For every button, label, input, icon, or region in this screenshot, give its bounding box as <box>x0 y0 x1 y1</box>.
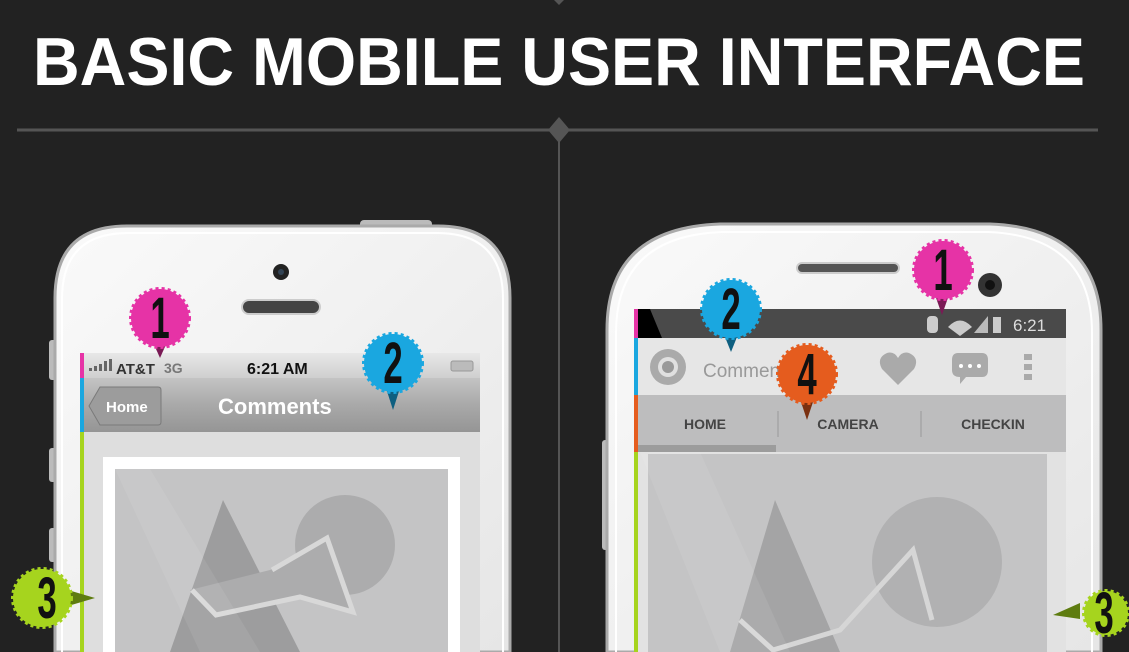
badge 2 right <box>702 278 760 352</box>
panel: Android <box>602 224 1102 652</box>
icon: speaker <box>797 263 899 273</box>
divider diamond <box>548 117 570 143</box>
badge 2 right: 2 <box>721 278 741 342</box>
status bar: 6:21 AM <box>247 361 308 378</box>
action bar <box>634 338 1066 395</box>
icon: speaker <box>242 300 320 314</box>
status bar: 6:21 <box>1013 316 1046 335</box>
badge 3 left: 3 <box>37 567 57 631</box>
badge 1 left: 1 <box>150 287 170 351</box>
badge 4 right <box>778 343 836 420</box>
tab bar <box>634 395 1066 452</box>
icon: camera <box>978 273 1002 297</box>
tab bar: HOME <box>684 416 726 432</box>
action bar: Comments <box>703 361 795 382</box>
status bar: AT&T <box>116 361 155 378</box>
badge 1 left <box>131 287 189 358</box>
panel: iPhone <box>49 220 510 652</box>
badge 3 right <box>1053 582 1128 646</box>
nav bar: Comments <box>218 394 332 419</box>
title: BASIC MOBILE USER INTERFACE <box>33 24 1085 100</box>
tab bar: CAMERA <box>817 416 879 432</box>
icon: camera <box>273 264 289 280</box>
nav bar: Home <box>106 399 148 416</box>
image placeholder <box>115 469 448 652</box>
image placeholder <box>648 454 1047 652</box>
tab bar: CHECKIN <box>961 416 1025 432</box>
nav bar <box>80 378 480 432</box>
badge 3 right: 3 <box>1094 582 1114 646</box>
content <box>80 432 480 652</box>
status bar: 3G <box>164 360 183 376</box>
badge 2 left <box>364 332 422 410</box>
status bar <box>634 309 1066 338</box>
badge 4 right: 4 <box>797 343 817 407</box>
badge 1 right <box>914 239 972 315</box>
top diamond <box>554 0 564 5</box>
status bar <box>80 353 480 378</box>
badge 2 left: 2 <box>383 332 403 396</box>
content <box>634 452 1066 652</box>
badge 1 right: 1 <box>933 239 953 303</box>
glare <box>640 452 790 652</box>
badge 3 left <box>13 567 95 631</box>
